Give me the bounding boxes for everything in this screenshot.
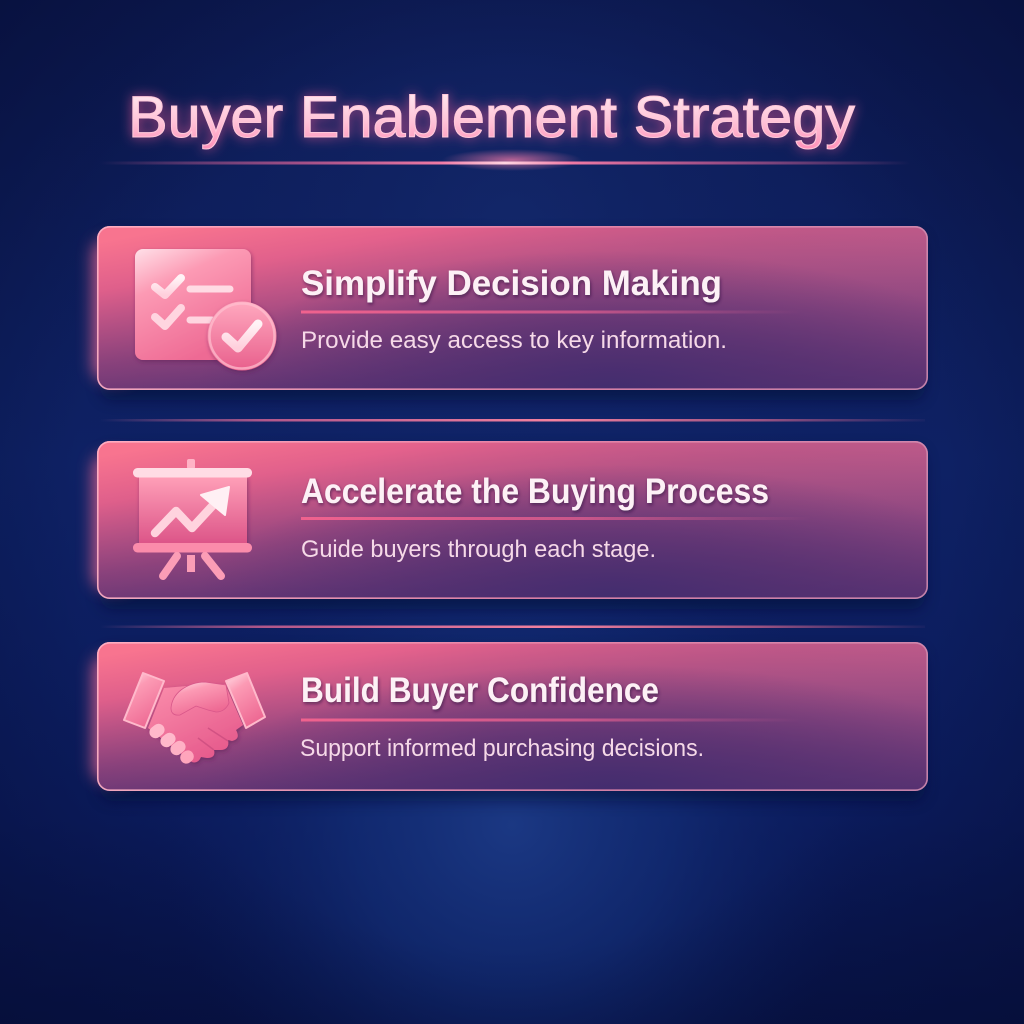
panel: accelerate the buying process (93, 441, 928, 609)
heading: Accelerate the Buying Process (301, 472, 769, 511)
heading rule (301, 718, 801, 722)
icon: presentation board with rising arrow (133, 459, 252, 576)
divider (100, 419, 925, 422)
panel: simplify decision making (93, 226, 928, 400)
heading rule (301, 517, 811, 520)
divider (100, 626, 925, 628)
description: Provide easy access to key information. (301, 327, 727, 354)
description: Guide buyers through each stage. (301, 536, 656, 563)
panel: build buyer confidence (93, 642, 928, 801)
icon: checklist with check badge (135, 249, 276, 370)
title: Buyer Enablement Strategy (128, 85, 855, 150)
heading: Build Buyer Confidence (301, 671, 659, 710)
heading: Simplify Decision Making (301, 264, 722, 303)
title underline (100, 149, 910, 171)
description: Support informed purchasing decisions. (300, 735, 704, 762)
icon: handshake (124, 673, 265, 766)
heading rule (301, 310, 801, 314)
